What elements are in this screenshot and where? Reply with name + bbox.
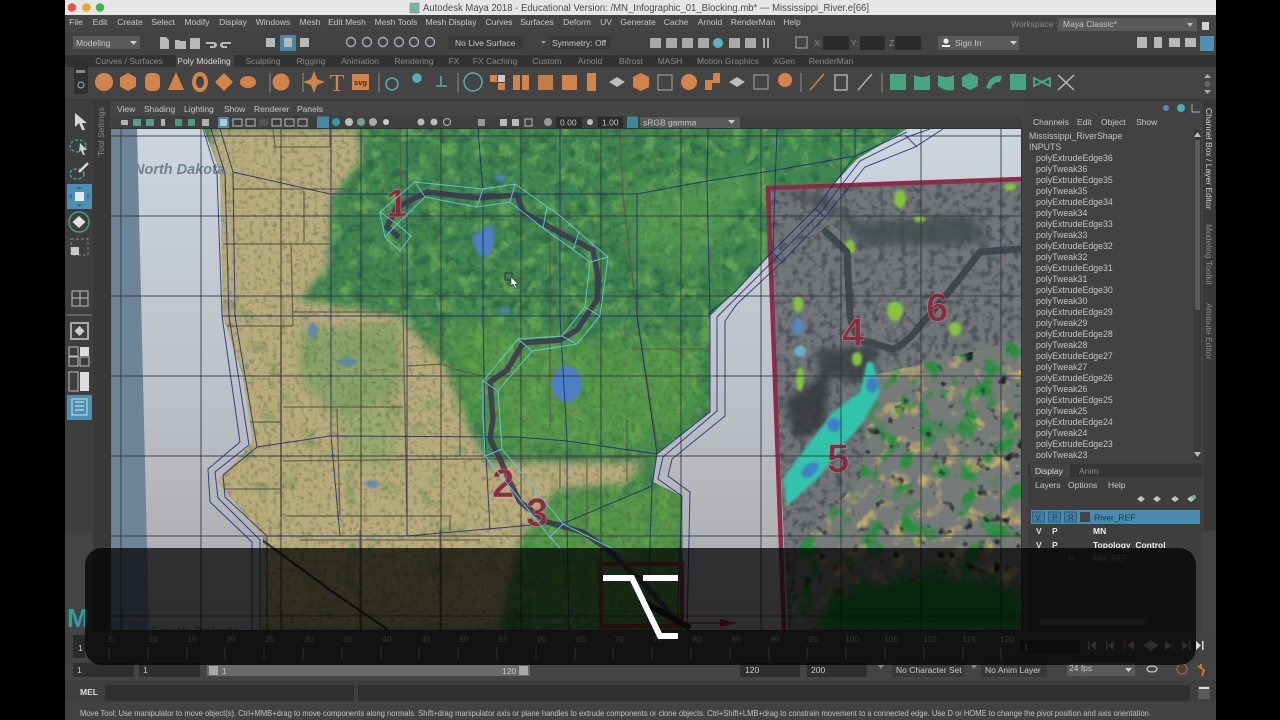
tool settings tab: Tool Settings <box>96 107 106 156</box>
layer: River_REF: V <box>1035 514 1041 522</box>
main menu bar: Edit <box>93 17 108 27</box>
transform fields <box>796 36 921 50</box>
shelf icons: transform tools <box>386 73 482 91</box>
construction history list: polyExtrudeEdge35 <box>1036 175 1113 185</box>
symmetry field: Symmetry: Off <box>552 38 607 48</box>
main menu bar: Modify <box>184 17 210 27</box>
frame labels: 30 <box>304 634 314 644</box>
frame labels: 45 <box>421 634 431 644</box>
shelf tabs: Custom <box>532 56 562 66</box>
transform fields: Y: <box>851 38 859 48</box>
command result <box>358 685 1190 701</box>
ticks <box>109 647 1001 660</box>
start frame fields: 1 <box>77 665 82 675</box>
colour space selector <box>627 116 740 128</box>
file icon <box>410 3 419 13</box>
construction history list: polyTweak35 <box>1036 186 1087 196</box>
frame labels <box>109 634 1014 644</box>
inset numbers: 4 <box>842 311 865 355</box>
main menu bar: Windows <box>256 17 290 27</box>
channel box menu: Show <box>1136 117 1158 127</box>
layer editor menu: Help <box>1108 480 1126 490</box>
window title: Autodesk Maya 2018 - Educational Version: /MN_Infographic_01_Blocking.mb* --- Mississippi_River.e[66] <box>423 3 869 14</box>
construction history list: polyTweak27 <box>1036 362 1087 372</box>
icon: option key glyph <box>603 578 678 636</box>
construction history list: polyExtrudeEdge31 <box>1036 263 1113 273</box>
layer editor menu: Options <box>1068 480 1097 490</box>
frame labels: 65 <box>576 634 586 644</box>
metro inset map <box>770 181 1021 630</box>
lasso tool <box>70 140 87 155</box>
shelf tabs: XGen <box>773 56 795 66</box>
layer: MN: P <box>1052 526 1058 536</box>
title bar <box>65 0 1216 15</box>
construction history list: polyTweak28 <box>1036 340 1087 350</box>
minnesota river <box>262 540 388 630</box>
sign in <box>938 36 1019 50</box>
frame labels: 70 <box>614 634 624 644</box>
viewport frame <box>110 128 1022 630</box>
layer editor panel <box>1028 462 1202 632</box>
construction history list: polyExtrudeEdge28 <box>1036 329 1113 339</box>
layer editor tabs: Anim <box>1079 466 1098 476</box>
anim layer: No Anim Layer <box>985 665 1041 675</box>
selection mode icons <box>266 35 309 51</box>
playback controls <box>1088 640 1204 651</box>
layer editor menu: Layers <box>1035 480 1061 490</box>
vertical divider bands <box>65 99 1216 101</box>
topology control cage <box>203 129 943 630</box>
construction history list: polyExtrudeEdge34 <box>1036 197 1113 207</box>
panel menu bar: Shading <box>144 104 175 114</box>
forest texture <box>206 129 900 542</box>
file icons <box>160 37 231 49</box>
main menu bar: Display <box>219 17 248 27</box>
panel menu bar: Lighting <box>184 104 214 114</box>
shelf tabs: FX Caching <box>473 56 517 66</box>
shelf tabs: Bifrost <box>619 56 644 66</box>
layer scrollbar <box>1040 619 1145 625</box>
layer editor tabs: Display <box>1035 466 1064 476</box>
frame labels: 85 <box>731 634 741 644</box>
shelf separators <box>270 73 882 92</box>
outliner active <box>67 395 92 420</box>
live surface field <box>449 36 523 49</box>
layer: Topology_Control: Topology_Control <box>1093 540 1166 550</box>
panel menu bar <box>111 102 1021 116</box>
end frame fields: 200 <box>811 665 825 675</box>
inset water <box>783 317 880 506</box>
reference grid <box>111 129 1021 630</box>
select tool <box>75 113 87 130</box>
construction history list: polyExtrudeEdge36 <box>1036 153 1113 163</box>
layer: MN_REF: MN_REF <box>1093 553 1128 563</box>
construction history list: polyExtrudeEdge24 <box>1036 417 1113 427</box>
character set <box>878 663 964 677</box>
layer: River_REF: River_REF <box>1094 512 1136 522</box>
shelf tabs: MASH <box>658 56 682 66</box>
left dark strip <box>111 129 149 630</box>
construction history list: polyTweak25 <box>1036 406 1087 416</box>
main menu bar <box>69 17 801 27</box>
current time field <box>1020 640 1080 654</box>
help line: Move Tool: Use manipulator to move object(s). Ctrl+MMB+drag to move components along normals. Shift+drag manipulator axis or plane handles to extrude components or clone objects. Ctrl+Shift+LMB+drag to constrain movement to a connected edge. Use D or HOME to change the pivot position and axis orientation. <box>80 708 1151 718</box>
map numbers <box>386 182 548 535</box>
paint tool <box>70 163 88 179</box>
inset dark bands <box>775 190 990 440</box>
tool box <box>65 101 93 532</box>
frame labels: 5 <box>109 634 114 644</box>
bright forest areas <box>445 170 760 630</box>
layer: Topology_Control <box>1036 540 1166 550</box>
layer: MN_REF: R <box>1068 553 1074 563</box>
workspace selector: Workspace : <box>1011 19 1058 29</box>
construction history list: polyExtrudeEdge23 <box>1036 439 1113 449</box>
move tool active <box>67 184 92 209</box>
shelf tabs <box>65 55 1216 68</box>
layer: MN <box>1036 526 1106 536</box>
inset bottom farmland <box>820 575 1021 630</box>
svg tool icon: svg <box>354 78 367 87</box>
command input <box>105 685 354 701</box>
panel menu bar: View <box>117 104 136 114</box>
inset border <box>768 179 1021 630</box>
construction history list: polyTweak26 <box>1036 384 1087 394</box>
county lines <box>223 129 710 630</box>
frame labels: 105 <box>884 634 898 644</box>
layer: MN: V <box>1036 526 1042 536</box>
layer: Topology_Control: V <box>1036 540 1042 550</box>
vertical editor tabs: Modeling Toolkit <box>1204 224 1214 285</box>
vertical editor tabs: Channel Box / Layer Editor <box>1204 108 1214 210</box>
panel menu bar: Panels <box>297 104 323 114</box>
construction history list: polyExtrudeEdge33 <box>1036 219 1113 229</box>
time slider <box>65 632 1216 664</box>
construction history list: polyExtrudeEdge29 <box>1036 307 1113 317</box>
window controls <box>68 3 104 12</box>
shelf icons: edit tools <box>810 74 872 90</box>
render icons <box>650 38 769 48</box>
live surface field: No Live Surface <box>455 38 516 48</box>
scale tool <box>71 239 88 255</box>
frame labels: 60 <box>537 634 547 644</box>
symmetry field <box>541 36 610 49</box>
downstream detail box <box>601 564 690 628</box>
construction history list: polyExtrudeEdge30 <box>1036 285 1113 295</box>
farmland regions <box>205 129 645 630</box>
anim layer <box>971 663 1047 677</box>
shelf tabs: Sculpting <box>246 56 281 66</box>
construction history list: polyExtrudeEdge27 <box>1036 351 1113 361</box>
channel box menu: Channels <box>1033 117 1069 127</box>
inset mottled suburbs <box>790 340 1021 630</box>
main menu bar: Mesh Display <box>425 17 477 27</box>
frame labels: 25 <box>265 634 275 644</box>
camera label: top -Y <box>552 617 574 626</box>
main menu bar: RenderMan <box>731 17 775 27</box>
command line: MEL <box>80 687 98 697</box>
south dakota label: South Dakota <box>150 623 240 639</box>
gamma field: 1.00 <box>602 118 619 128</box>
main menu bar: Cache <box>664 17 689 27</box>
frame labels: 115 <box>962 634 976 644</box>
layer: MN: MN <box>1093 526 1106 536</box>
shelf tabs: Rigging <box>297 56 326 66</box>
character set: No Character Set <box>896 665 962 675</box>
status line toolbar <box>65 32 1216 53</box>
time slider: 1 <box>78 643 83 653</box>
layer: River_REF: R <box>1068 514 1074 522</box>
river cage mesh <box>380 182 630 556</box>
main menu bar: UV <box>600 17 612 27</box>
frame labels: 110 <box>923 634 937 644</box>
construction history list: polyTweak34 <box>1036 208 1087 218</box>
layer: River_REF: P <box>1052 514 1057 522</box>
inset parks <box>793 183 1016 391</box>
main menu bar: Create <box>117 17 143 27</box>
object name and inputs heading: INPUTS <box>1029 142 1061 152</box>
frame labels: 10 <box>148 634 158 644</box>
sign in: Sign In <box>955 38 982 48</box>
shelf scroll arrows <box>1204 74 1211 94</box>
frame labels: 40 <box>382 634 392 644</box>
shelf icons: mesh tools <box>490 73 792 91</box>
end frame fields: 120 <box>745 665 759 675</box>
map numbers: 3 <box>526 491 548 535</box>
layout icon <box>72 291 88 306</box>
script editor button <box>1198 686 1210 699</box>
mixed vegetation in farmland <box>300 322 400 470</box>
frame labels: 55 <box>498 634 508 644</box>
mode dropdown <box>73 36 140 49</box>
shelf icons: green deformers <box>890 73 1074 90</box>
workspace selector <box>1011 18 1209 31</box>
vertical editor tabs: Attribute Editor <box>1204 303 1214 359</box>
start frame fields <box>73 663 200 677</box>
construction history list <box>1036 153 1113 460</box>
sidebar toggle icons <box>1137 36 1214 51</box>
mississippi river <box>387 192 680 625</box>
text tool icon: T <box>330 71 345 97</box>
end frame fields <box>740 663 867 677</box>
inset numbers <box>827 286 948 481</box>
construction history list: polyTweak32 <box>1036 252 1087 262</box>
main menu bar: Curves <box>486 17 512 27</box>
construction history list: polyTweak33 <box>1036 230 1087 240</box>
camera icons <box>121 119 209 126</box>
layer icons <box>1137 495 1196 502</box>
transform fields: X: <box>814 38 822 48</box>
layer: Topology_Control: P <box>1052 540 1058 550</box>
shelf tabs: Rendering <box>394 56 434 66</box>
range slider: 1 <box>222 666 227 676</box>
shortcut overlay panel <box>85 548 1196 665</box>
help line <box>65 704 1216 720</box>
shelf tabs: Motion Graphics <box>697 56 759 66</box>
inset numbers: 5 <box>827 437 849 481</box>
main menu bar: Generate <box>620 17 656 27</box>
construction history list: polyTweak29 <box>1036 318 1087 328</box>
main menu bar: Help <box>783 17 801 27</box>
construction history list: polyExtrudeEdge32 <box>1036 241 1113 251</box>
frame labels: 90 <box>770 634 780 644</box>
transform fields: Z: <box>889 38 897 48</box>
viewport with reference map <box>111 129 1030 640</box>
mode dropdown: Modeling <box>76 38 111 48</box>
shading icons <box>218 116 552 128</box>
rotate tool <box>69 212 89 232</box>
range slider <box>207 665 530 676</box>
shelf tabs: Animation <box>341 56 379 66</box>
channel box menu <box>1033 117 1158 127</box>
construction history list: polyTweak24 <box>1036 428 1087 438</box>
tool settings tab <box>93 101 110 632</box>
north dakota label: North Dakota <box>134 162 225 178</box>
mouse cursor <box>505 273 518 288</box>
current time field: 1 <box>1024 642 1029 652</box>
object name and inputs heading: Mississippi_RiverShape <box>1029 131 1122 141</box>
shelf tabs: Poly Modeling <box>177 56 231 66</box>
command line <box>65 680 1216 703</box>
construction history list: polyExtrudeEdge25 <box>1036 395 1113 405</box>
layer: River_REF <box>1031 510 1200 524</box>
Maya M logo: M <box>67 603 89 633</box>
panel icons <box>1163 104 1200 112</box>
layer editor menu <box>1035 480 1126 490</box>
inset river <box>823 229 1021 349</box>
construction history list: polyExtrudeEdge26 <box>1036 373 1113 383</box>
frame labels: 35 <box>343 634 353 644</box>
main menu bar: Edit Mesh <box>328 17 366 27</box>
main menu bar: File <box>69 17 83 27</box>
snap icons <box>346 38 434 46</box>
main menu bar: Mesh <box>300 17 321 27</box>
map numbers: 2 <box>492 462 514 506</box>
viewport background <box>111 129 1021 630</box>
frame labels: 100 <box>845 634 859 644</box>
state map <box>200 129 920 630</box>
current frame marker <box>73 635 85 658</box>
frame labels: 20 <box>226 634 236 644</box>
range slider: 120 <box>502 666 516 676</box>
construction history list: polyTweak36 <box>1036 164 1087 174</box>
exposure field: 0.00 <box>560 118 577 128</box>
colour space selector: sRGB gamma <box>643 118 697 128</box>
channel box panel <box>1030 104 1201 460</box>
playback icons <box>1147 664 1204 676</box>
range slider row <box>65 663 1216 680</box>
layer editor tabs <box>1028 464 1202 477</box>
channel box scrollbar <box>1194 130 1201 460</box>
svg tool icon <box>352 74 369 90</box>
layer: MN_REF <box>1068 553 1128 563</box>
construction history list: polyTweak30 <box>1036 296 1087 306</box>
fps selector: 24 fps <box>1069 663 1092 673</box>
channel box menu: Object <box>1101 117 1126 127</box>
shelf tabs: RenderMan <box>809 56 853 66</box>
object name and inputs heading <box>1029 131 1122 152</box>
main menu bar: Surfaces <box>520 17 554 27</box>
shelf tabs: Arnold <box>578 56 603 66</box>
lakes <box>308 175 582 488</box>
vertical editor tabs <box>1203 101 1216 531</box>
frame labels: 120 <box>1000 634 1014 644</box>
shelf icons: polygon primitives <box>95 71 369 97</box>
frame labels: 75 <box>653 634 663 644</box>
construction history list: polyTweak31 <box>1036 274 1087 284</box>
map numbers: 1 <box>386 182 408 226</box>
main menu bar: Select <box>151 17 175 27</box>
panel toolbar <box>111 116 1021 129</box>
panel menu bar: Renderer <box>254 104 290 114</box>
exposure field <box>556 117 582 128</box>
frame labels: 80 <box>692 634 702 644</box>
shelf tabs: Curves / Surfaces <box>95 56 163 66</box>
frame labels: 15 <box>187 634 197 644</box>
main menu bar: Arnold <box>698 17 723 27</box>
shelf tabs: FX <box>449 56 460 66</box>
gamma field <box>587 117 623 128</box>
panel layout buttons <box>69 322 89 391</box>
manipulator arrow <box>688 619 737 627</box>
panel menu bar: Show <box>224 104 246 114</box>
shelf side controls <box>74 60 88 94</box>
frame labels: 50 <box>459 634 469 644</box>
channel box menu: Edit <box>1077 117 1092 127</box>
fps selector <box>1067 663 1135 676</box>
workspace selector: Maya Classic* <box>1063 19 1118 29</box>
axis gizmo <box>130 612 140 622</box>
inset numbers: 6 <box>926 286 948 330</box>
construction history list: polyTweak23 <box>1036 450 1087 460</box>
main menu bar: Deform <box>563 17 591 27</box>
main menu bar: Mesh Tools <box>375 17 417 27</box>
start frame fields: 1 <box>143 665 148 675</box>
frame labels: 95 <box>808 634 818 644</box>
